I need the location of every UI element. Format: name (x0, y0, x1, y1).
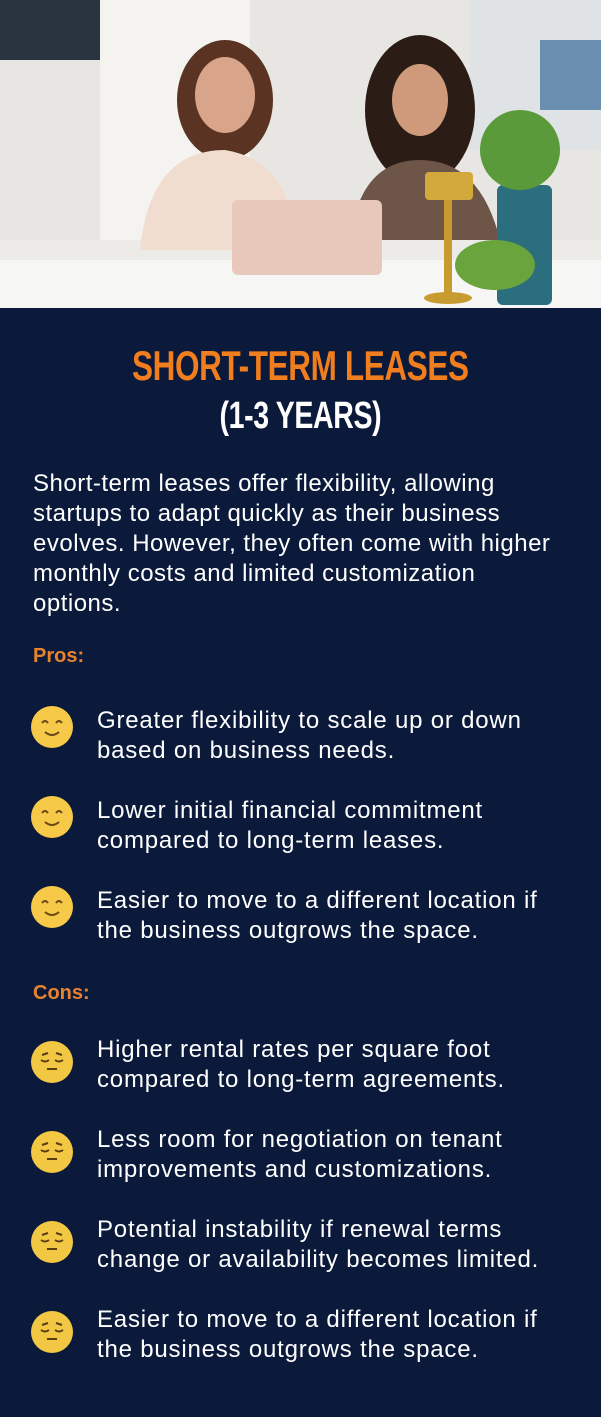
con item 4: the business outgrows the space. (97, 1336, 479, 1363)
con item 1 (31, 1036, 505, 1093)
pro item 2 (31, 796, 483, 854)
con item 1: Higher rental rates per square foot (97, 1036, 491, 1063)
title: SHORT-TERM LEASES (132, 342, 469, 389)
intro paragraph: startups to adapt quickly as their business (33, 500, 500, 527)
con item 4 (31, 1306, 538, 1363)
con item 3: Potential instability if renewal terms (97, 1216, 502, 1243)
con item 3: change or availability becomes limited. (97, 1246, 539, 1273)
intro paragraph: evolves. However, they often come with higher (33, 530, 550, 557)
cons list (31, 1036, 539, 1363)
pro item 1: based on business needs. (97, 737, 395, 764)
pro item 3 (31, 886, 538, 944)
heading: pros: Pros: (33, 645, 84, 667)
pros list (31, 706, 538, 944)
con item 4: Easier to move to a different location if (97, 1306, 538, 1333)
subtitle: (1-3 YEARS) (220, 395, 381, 437)
intro paragraph: options. (33, 590, 121, 617)
intro paragraph (33, 470, 550, 617)
photo: office scene (0, 0, 601, 308)
intro paragraph: Short-term leases offer flexibility, allowing (33, 470, 495, 497)
pro item 1: Greater flexibility to scale up or down (97, 707, 522, 734)
con item 1: compared to long-term agreements. (97, 1066, 505, 1093)
con item 3 (31, 1216, 539, 1273)
intro paragraph: monthly costs and limited customization (33, 560, 475, 587)
con item 2 (31, 1126, 503, 1183)
pro item 1 (31, 706, 522, 764)
pro item 3: Easier to move to a different location if (97, 887, 538, 914)
pro item 2: compared to long-term leases. (97, 827, 444, 854)
heading: cons: Cons: (33, 982, 90, 1004)
con item 2: improvements and customizations. (97, 1156, 492, 1183)
con item 2: Less room for negotiation on tenant (97, 1126, 503, 1153)
pro item 2: Lower initial financial commitment (97, 797, 483, 824)
pro item 3: the business outgrows the space. (97, 917, 479, 944)
